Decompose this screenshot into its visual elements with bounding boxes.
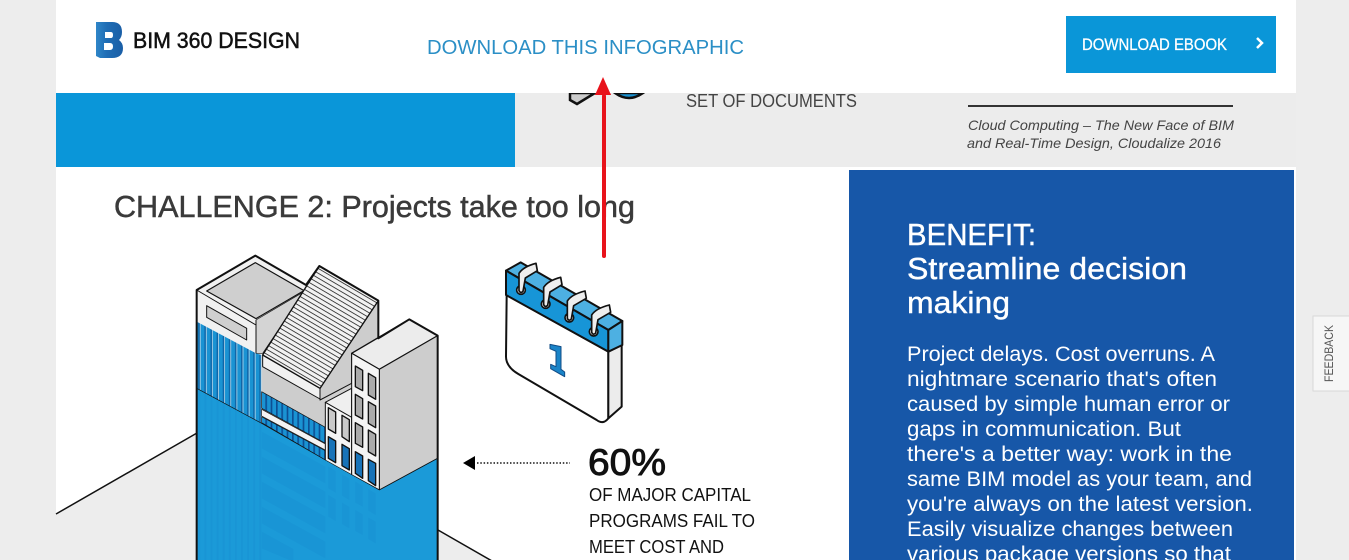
ground plane (56, 433, 492, 560)
benefit body text: there's a better way: work in the (907, 443, 1232, 466)
benefit body text: Project delays. Cost overruns. A (907, 343, 1215, 366)
icon: BIM 360 logo (96, 22, 123, 58)
panel: sticky header (56, 0, 1296, 93)
tab: feedback (1313, 316, 1349, 391)
flood water (197, 388, 438, 560)
benefit body text: same BIM model as your team, and (907, 468, 1252, 491)
benefit body text: gaps in communication. But (907, 418, 1181, 441)
logo wordmark: BIM 360 DESIGN (133, 28, 300, 53)
benefit body text: Easily visualize changes between (907, 518, 1233, 541)
arrow head over header (595, 77, 611, 95)
icon: calendar (506, 262, 622, 422)
panel: benefit (849, 170, 1294, 560)
heading: challenge 2: CHALLENGE 2: Projects take too long (114, 189, 635, 224)
tab: feedback: FEEDBACK (1322, 325, 1336, 382)
arrow: dotted leader (463, 456, 570, 470)
stat: 60%: MEET COST AND (589, 537, 724, 557)
button: download ebook (1066, 16, 1276, 73)
stat: 60% (588, 442, 755, 557)
benefit body text (907, 343, 1253, 560)
text: set of documents: SET OF DOCUMENTS (686, 91, 857, 111)
illustration: flooded buildings (197, 256, 438, 560)
calendar date (550, 344, 565, 377)
heading: benefit: BENEFIT: (907, 217, 1036, 252)
link: download infographic: DOWNLOAD THIS INFOGRAPHIC (427, 37, 744, 59)
stat: 60%: 60% (588, 442, 666, 483)
benefit body text: you're always on the latest version. (907, 493, 1253, 516)
panel: previous section strip (56, 91, 1296, 167)
stat: 60%: PROGRAMS FAIL TO (589, 511, 755, 531)
citation: Cloud Computing – The New Face of BIM (968, 117, 1234, 133)
tall building (352, 319, 438, 490)
tower (197, 256, 307, 423)
mid building (262, 266, 378, 460)
building outline (197, 256, 438, 560)
benefit body text: nightmare scenario that's often (907, 368, 1217, 391)
citation (967, 105, 1234, 151)
citation: and Real-Time Design, Cloudalize 2016 (967, 135, 1221, 151)
heading: benefit: making (907, 285, 1010, 320)
stat: 60%: OF MAJOR CAPITAL (589, 485, 751, 505)
small building (325, 388, 352, 476)
button: download ebook: DOWNLOAD EBOOK (1082, 35, 1228, 54)
icon: partial document illustration (570, 93, 643, 104)
arrow: red pointer (595, 77, 611, 258)
panel: challenge 2 (56, 167, 1296, 560)
heading: benefit: Streamline decision (907, 251, 1187, 286)
heading: benefit (907, 217, 1187, 320)
benefit body text: caused by simple human error or (907, 393, 1230, 416)
calendar rings (517, 263, 611, 336)
